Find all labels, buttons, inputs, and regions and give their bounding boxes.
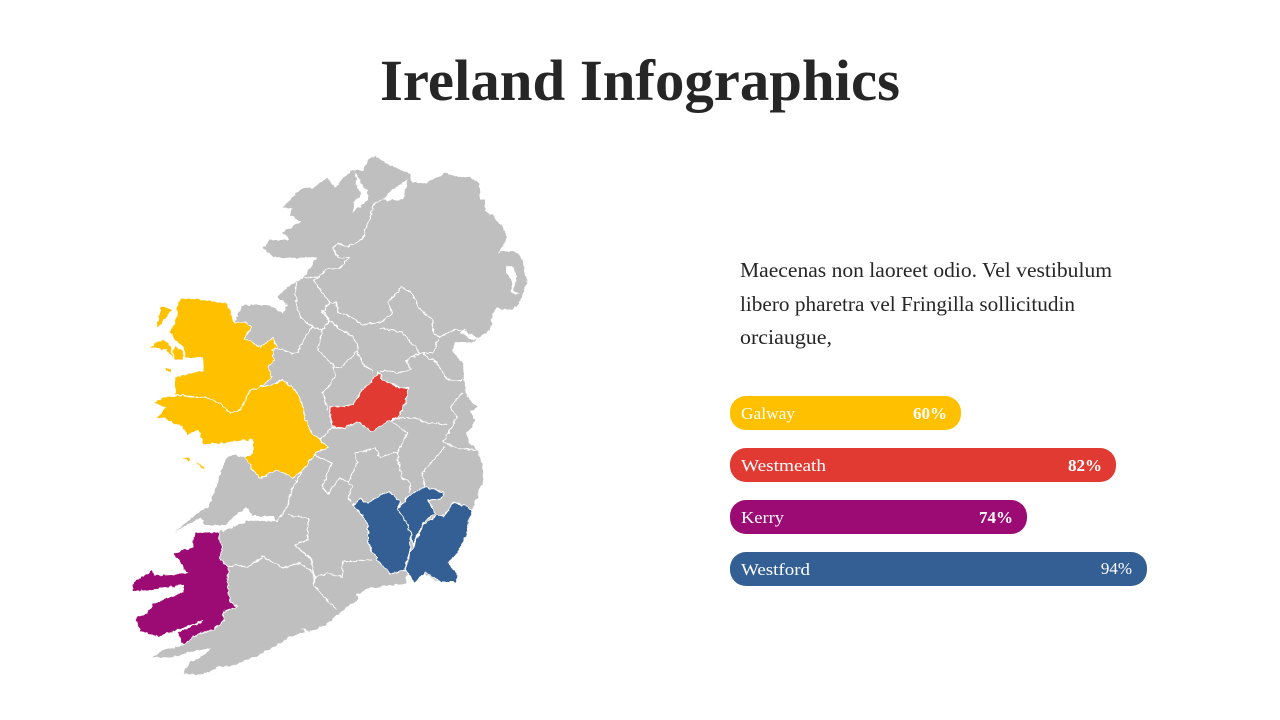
- county: Carlow: [398, 487, 443, 545]
- land: grey island silhouette: [152, 155, 527, 675]
- map of Ireland: [132, 155, 527, 675]
- bar: Westmeath 82%: [730, 448, 1116, 482]
- description paragraph: [740, 258, 1112, 349]
- bar: Westford 94%: Westford: [741, 560, 811, 579]
- county: Kilkenny: [353, 491, 411, 574]
- bar: Westford 94%: [730, 552, 1147, 586]
- bar: Galway 60%: 60%: [913, 404, 947, 423]
- county: Kerry (purple): [132, 532, 237, 645]
- bar: Westmeath 82%: Westmeath: [741, 456, 827, 475]
- description paragraph: libero pharetra vel Fringilla sollicitudin: [740, 292, 1075, 316]
- bar: Galway 60%: Galway: [741, 404, 796, 423]
- description paragraph: Maecenas non laoreet odio. Vel vestibulum: [740, 258, 1112, 282]
- bar: Galway 60%: [730, 396, 961, 430]
- bar: Kerry 74%: [730, 500, 1027, 534]
- county: Westmeath (red): [330, 372, 408, 432]
- description paragraph: orciaugue,: [740, 325, 832, 349]
- counties: Westford group (blue): [353, 487, 472, 584]
- county borders: [229, 200, 477, 610]
- county: Galway and Mayo (yellow): [150, 298, 328, 478]
- inland water: loughs: [352, 172, 520, 340]
- bar: Kerry 74%: Kerry: [741, 508, 785, 527]
- county: Wexford: [406, 503, 472, 584]
- bar: Kerry 74%: 74%: [979, 508, 1013, 527]
- title: Ireland Infographics: [380, 48, 900, 113]
- bar: Westford 94%: 94%: [1101, 559, 1132, 578]
- bar: Westmeath 82%: 82%: [1068, 456, 1102, 475]
